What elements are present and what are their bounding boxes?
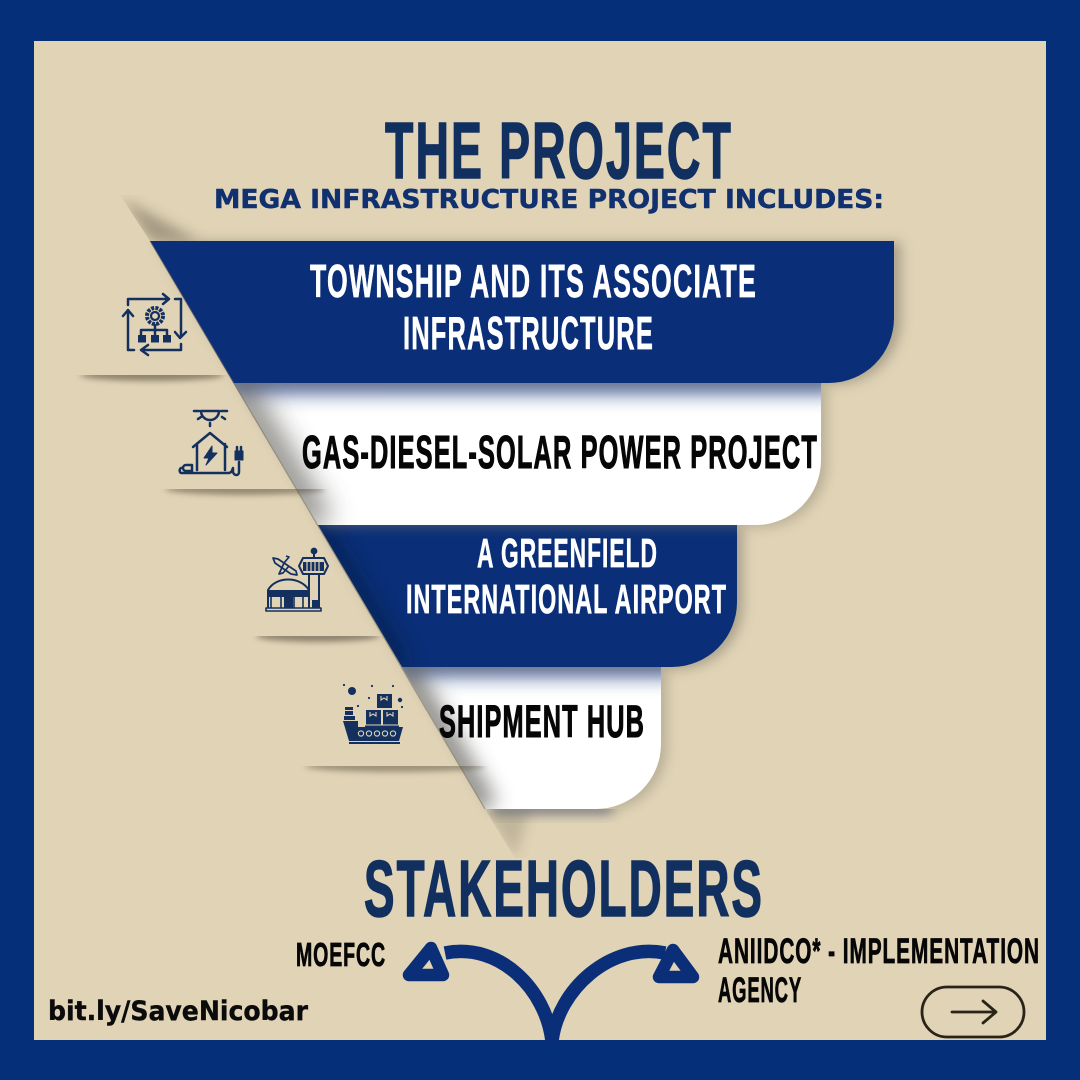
label: airport: A GREENFIELD: [477, 530, 658, 576]
band 1: township: [150, 241, 901, 384]
icon: process gear: [123, 294, 186, 355]
band 4: shipment hub: [402, 667, 672, 814]
stakeholder: ANIIDCO: [718, 932, 1040, 1010]
link: bit.ly: bit.ly/SaveNicobar: [48, 996, 309, 1027]
funnel: [150, 241, 901, 811]
icon: airport: [266, 549, 328, 611]
stakeholder: ANIIDCO: AGENCY: [718, 971, 802, 1010]
ledge shadow 4: [304, 766, 486, 776]
label: township: [310, 255, 757, 359]
icon: cargo ship: [343, 684, 403, 744]
subtitle: MEGA INFRASTRUCTURE PROJECT INCLUDES:: [214, 185, 884, 215]
label: airport: INTERNATIONAL AIRPORT: [406, 576, 727, 622]
icon: solar house: [180, 411, 243, 475]
arrow: left to MoEFCC: [409, 948, 552, 1041]
ledge shadow 2: [164, 489, 326, 498]
band 3: airport: [318, 525, 743, 669]
shadow under lowest band: [492, 803, 612, 813]
heading: stakeholders: STAKEHOLDERS: [364, 844, 764, 933]
label: township: INFRASTRUCTURE: [403, 307, 654, 359]
diagonal fold shadow above funnel: [122, 198, 200, 241]
band 2: power project: [220, 372, 840, 527]
next button: [922, 987, 1024, 1037]
ledge shadow 1: [79, 375, 225, 384]
label: township: TOWNSHIP AND ITS ASSOCIATE: [310, 255, 757, 307]
diagonal crease line: [150, 241, 485, 809]
label: shipment hub: SHIPMENT HUB: [439, 696, 645, 747]
arrow: right to ANIIDCO: [552, 950, 693, 1041]
diagonal fold shadow below funnel: [487, 809, 530, 854]
ledge shadow 3: [254, 636, 381, 646]
label: airport: [406, 530, 727, 622]
title: THE PROJECT: [385, 106, 733, 195]
stakeholder: MoEFCC: MOEFCC: [296, 936, 386, 973]
